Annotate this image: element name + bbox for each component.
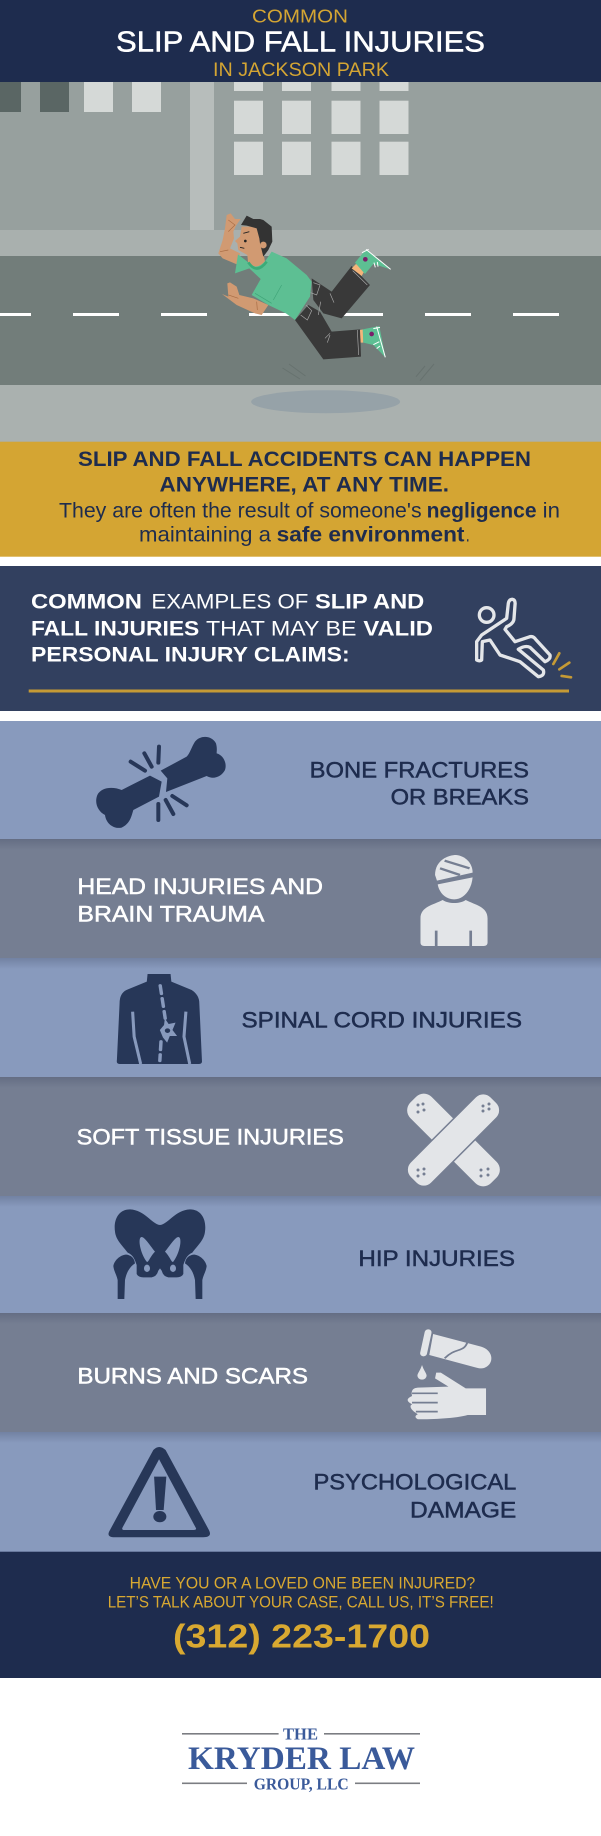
- icon: broken bone: [96, 737, 226, 828]
- title line: slip and fall injuries: SLIP AND FALL INJURIES: [116, 27, 485, 59]
- injury row: spinal cord: [0, 958, 601, 1077]
- statement body: .: [466, 524, 470, 547]
- row label: PSYCHOLOGICAL: [314, 1469, 516, 1494]
- row label: HEAD INJURIES AND: [77, 874, 323, 899]
- panel heading: SLIP AND: [315, 590, 424, 614]
- panel heading: PERSONAL INJURY CLAIMS:: [31, 643, 350, 667]
- cta text: HAVE YOU OR A LOVED ONE BEEN INJURED?: [130, 1575, 475, 1593]
- panel heading: VALID: [363, 616, 433, 640]
- icon: falling person: [477, 599, 571, 677]
- row label: DAMAGE: [410, 1497, 516, 1522]
- injury row: psychological damage: [0, 1432, 601, 1552]
- call to action footer: [0, 1552, 601, 1678]
- statement heading: ANYWHERE, AT ANY TIME.: [160, 473, 449, 497]
- title banner: [0, 0, 601, 82]
- statement body: in: [543, 499, 560, 522]
- cta text: [108, 1575, 494, 1612]
- icon: warning triangle: [109, 1447, 210, 1537]
- panel heading: [31, 590, 433, 667]
- injury row: bone fractures: [0, 721, 601, 839]
- street scene illustration: [0, 82, 601, 442]
- navy panel: common examples: [0, 566, 601, 711]
- statement body: negligence: [427, 499, 537, 522]
- icon: crossed bandages: [403, 1089, 504, 1191]
- row label: [77, 874, 323, 927]
- statement body: They are often the result of someone's: [59, 499, 422, 522]
- icon: spine back: [117, 974, 202, 1064]
- phone number: (312) 223-1700: [173, 1617, 430, 1654]
- law firm logo: GROUP, LLC: [254, 1774, 349, 1793]
- title line: common: COMMON: [252, 6, 348, 27]
- statement body: maintaining a: [139, 524, 271, 547]
- law firm logo: KRYDER LAW: [188, 1741, 415, 1777]
- title line: in jackson park: IN JACKSON PARK: [213, 60, 389, 81]
- injury row: head injuries: [0, 839, 601, 958]
- row label: HIP INJURIES: [358, 1246, 515, 1271]
- injury row: soft tissue: [0, 1077, 601, 1196]
- row label: [314, 1469, 516, 1522]
- injury row: hip: [0, 1196, 601, 1313]
- panel heading: THAT MAY BE: [206, 616, 356, 640]
- cta text: LET’S TALK ABOUT YOUR CASE, CALL US, IT’S FREE!: [108, 1594, 494, 1612]
- row label: BONE FRACTURES: [310, 757, 529, 782]
- statement heading: [78, 447, 531, 497]
- row label: OR BREAKS: [391, 785, 529, 810]
- falling man: [218, 213, 391, 359]
- row label: [310, 757, 529, 810]
- statement body: safe environment: [277, 524, 465, 547]
- row label: BURNS AND SCARS: [77, 1363, 308, 1388]
- panel heading: COMMON: [31, 590, 142, 614]
- law firm logo: [182, 1724, 420, 1793]
- row label: BRAIN TRAUMA: [77, 902, 265, 927]
- statement heading: SLIP AND FALL ACCIDENTS CAN HAPPEN: [78, 447, 531, 471]
- row label: SPINAL CORD INJURIES: [242, 1008, 522, 1033]
- gold statement banner: [0, 442, 601, 557]
- icon: pelvis: [113, 1209, 207, 1299]
- row label: SOFT TISSUE INJURIES: [77, 1124, 344, 1149]
- icon: chemical on hand: [408, 1332, 491, 1419]
- injury row: burns and scars: [0, 1313, 601, 1432]
- icon: bandaged head: [420, 855, 488, 946]
- statement body: [59, 499, 560, 547]
- panel heading: EXAMPLES OF: [151, 590, 308, 614]
- panel heading: FALL INJURIES: [31, 616, 199, 640]
- law firm logo: THE: [283, 1724, 318, 1743]
